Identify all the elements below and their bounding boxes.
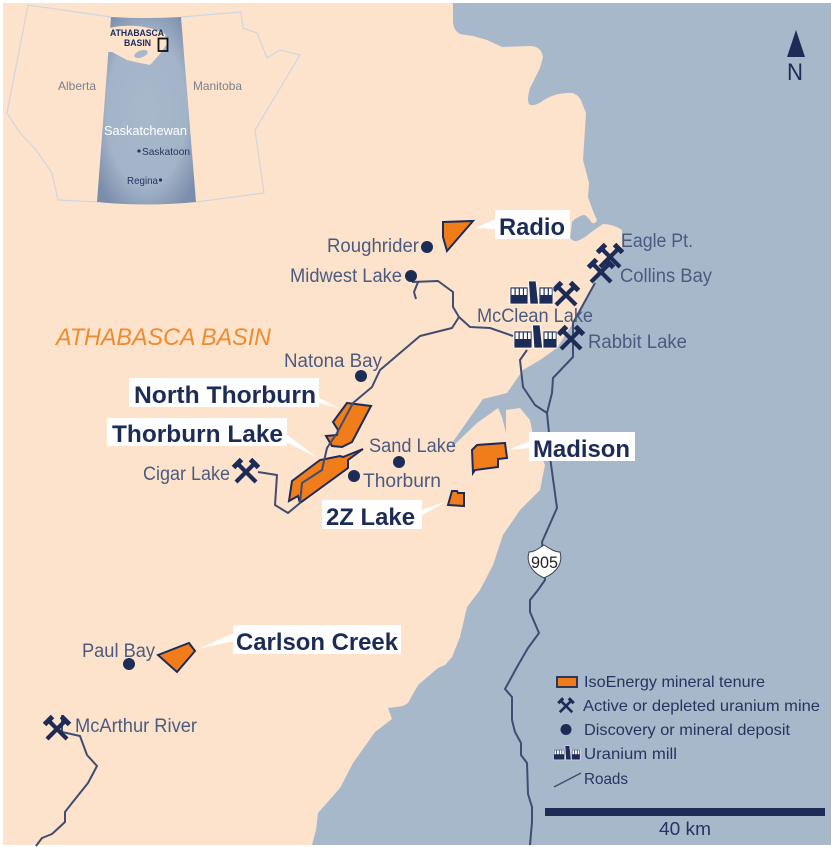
legend [554, 674, 820, 788]
deposit dot: Sand Lake [393, 456, 405, 468]
callout: Radio [475, 210, 570, 241]
callout: Carlson Creek: Carlson Creek [236, 629, 399, 656]
tenure: Thorburn Lake [289, 449, 363, 503]
region label: Athabasca Basin: ATHABASCA BASIN [54, 324, 272, 351]
inset locator map [7, 5, 300, 204]
callout: 2Z Lake [322, 500, 445, 531]
place label: Collins Bay: Collins Bay [620, 266, 712, 287]
inset: Athabasca Basin label: BASIN [124, 38, 151, 49]
place label: Sand Lake: Sand Lake [369, 436, 456, 457]
deposit dot: Midwest Lake [405, 270, 417, 282]
place label: Cigar Lake: Cigar Lake [143, 464, 230, 485]
callout: Madison: Madison [533, 436, 630, 463]
inset: Athabasca Basin label: ATHABASCA [110, 28, 164, 39]
mine icon: Collins Bay [588, 260, 614, 282]
water body [312, 3, 831, 845]
callout: North Thorburn: North Thorburn [134, 382, 316, 409]
callout: Thorburn Lake: Thorburn Lake [112, 421, 283, 448]
deposit dot: Paul Bay [123, 658, 135, 670]
tenure: North Thorburn [326, 403, 371, 447]
place label: Rabbit Lake: Rabbit Lake [588, 332, 687, 353]
mine icon: Cigar Lake [234, 460, 258, 482]
tenure: Radio [443, 221, 473, 251]
inset: study area box [158, 38, 168, 51]
inset: Manitoba label: Manitoba [193, 79, 242, 93]
legend: roads [554, 771, 628, 788]
north arrow [787, 30, 805, 86]
inset: Athabasca Basin label [110, 28, 164, 49]
inset: Saskatchewan label: Saskatchewan [104, 123, 187, 138]
mine icon: McClean Lake [554, 282, 578, 305]
place label: Midwest Lake: Midwest Lake [290, 266, 402, 287]
legend: tenure: IsoEnergy mineral tenure [584, 674, 765, 691]
highway 905 shield [528, 545, 561, 578]
place label: Paul Bay: Paul Bay [82, 641, 155, 662]
mine icon: Eagle Pt. [598, 244, 622, 267]
place label: Natona Bay: Natona Bay [284, 351, 382, 372]
legend: deposit: Discovery or mineral deposit [584, 722, 791, 739]
legend: mill: Uranium mill [584, 746, 677, 763]
inset: lake [133, 48, 149, 60]
callout: Carlson Creek [198, 625, 401, 656]
place label: McClean Lake: McClean Lake [477, 306, 593, 327]
deposit dot: Thorburn [348, 470, 360, 482]
place label: Roughrider: Roughrider [327, 236, 420, 257]
mine icon: Rabbit Lake [558, 326, 584, 349]
scale bar: 40 km [659, 819, 711, 839]
callout: Madison [508, 432, 635, 463]
callout: Radio: Radio [499, 214, 565, 241]
roads [36, 281, 595, 846]
inset: Regina: Regina [127, 175, 158, 187]
inset: Saskatoon: Saskatoon [142, 146, 190, 158]
tenure: Carlson Creek [158, 643, 195, 672]
inset: Athabasca Basin land [108, 26, 167, 65]
callout: Thorburn Lake [107, 418, 318, 458]
inset: Saskatchewan province [97, 17, 196, 204]
mine icon: McArthur River [44, 716, 70, 739]
callout: 2Z Lake: 2Z Lake [326, 504, 415, 531]
deposit dot: Roughrider [421, 241, 433, 253]
legend: roads: Roads [584, 771, 628, 788]
place label: Eagle Pt.: Eagle Pt. [621, 231, 693, 252]
north arrow: N [787, 59, 803, 86]
scale bar [545, 808, 825, 839]
place label: Thorburn: Thorburn [363, 471, 441, 492]
tenure: 2Z Lake [448, 491, 464, 506]
highway 905 shield: 905 [531, 553, 558, 572]
inset: Alberta and Manitoba outlines [7, 5, 300, 202]
place label: McArthur River: McArthur River [75, 716, 198, 737]
mill icon: McClean Lake [510, 281, 553, 304]
deposit dot: Natona Bay [355, 370, 367, 382]
tenure: Madison [472, 443, 507, 473]
inset: Alberta label: Alberta [58, 79, 96, 93]
mill icon: Rabbit Lake [514, 325, 557, 348]
legend: mine: Active or depleted uranium mine [583, 698, 820, 715]
